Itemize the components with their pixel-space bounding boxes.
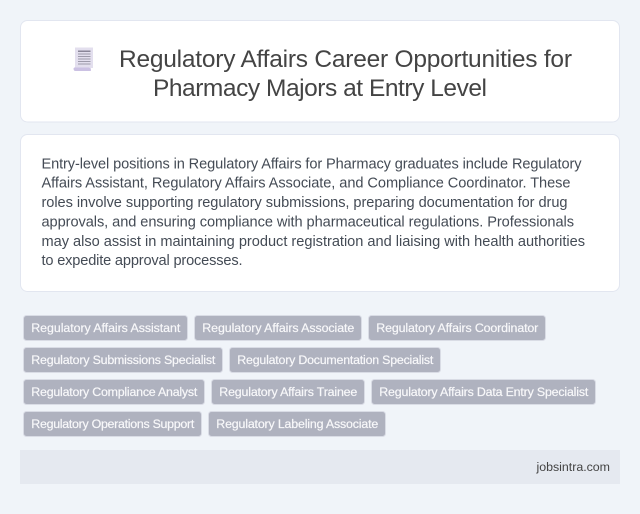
panel: description text: to expedite approval processes.	[42, 253, 242, 269]
tag: Regulatory Documentation Specialist	[237, 353, 434, 367]
panel: description text: roles involve supporting regulatory submissions, preparing documentation for drug	[42, 195, 568, 211]
tag	[368, 316, 546, 340]
heading: Pharmacy Majors at Entry Level	[153, 75, 487, 102]
panel: description text: Entry-level positions in Regulatory Affairs for Pharmacy graduates include Regulatory	[42, 156, 582, 172]
tag: Regulatory Submissions Specialist	[31, 353, 216, 367]
panel: title header	[20, 20, 620, 122]
tag	[24, 412, 202, 436]
tag	[230, 348, 440, 372]
tag: Regulatory Affairs Assistant	[31, 321, 181, 335]
panel: description text: Affairs Assistant, Regulatory Affairs Associate, and Compliance Coordinator. These	[42, 176, 570, 192]
tag	[24, 348, 222, 372]
tag: Regulatory Affairs Coordinator	[376, 321, 538, 335]
tag: Regulatory Affairs Data Entry Specialist	[379, 385, 589, 399]
tag: Regulatory Affairs Associate	[202, 321, 354, 335]
heading	[119, 46, 572, 102]
panel: description text	[20, 134, 620, 292]
tag	[372, 380, 596, 404]
footer bar: jobsintra.com	[536, 460, 610, 474]
tag	[24, 380, 204, 404]
heading: Regulatory Affairs Career Opportunities for	[119, 46, 572, 73]
tag: Regulatory Affairs Trainee	[219, 385, 357, 399]
panel: description text: approvals, and ensuring compliance with pharmaceutical regulations. Professionals	[42, 214, 574, 230]
footer bar	[20, 450, 620, 484]
tag: Regulatory Labeling Associate	[216, 417, 378, 431]
panel: job title tags	[24, 316, 596, 436]
tag	[24, 316, 188, 340]
tag	[208, 412, 386, 436]
tag: Regulatory Compliance Analyst	[31, 385, 198, 399]
tag: Regulatory Operations Support	[31, 417, 195, 431]
tag	[212, 380, 364, 404]
panel: description text: may also assist in maintaining product registration and liaising with health authorities	[42, 234, 585, 250]
tag	[194, 316, 362, 340]
icon: document scroll	[74, 48, 93, 71]
